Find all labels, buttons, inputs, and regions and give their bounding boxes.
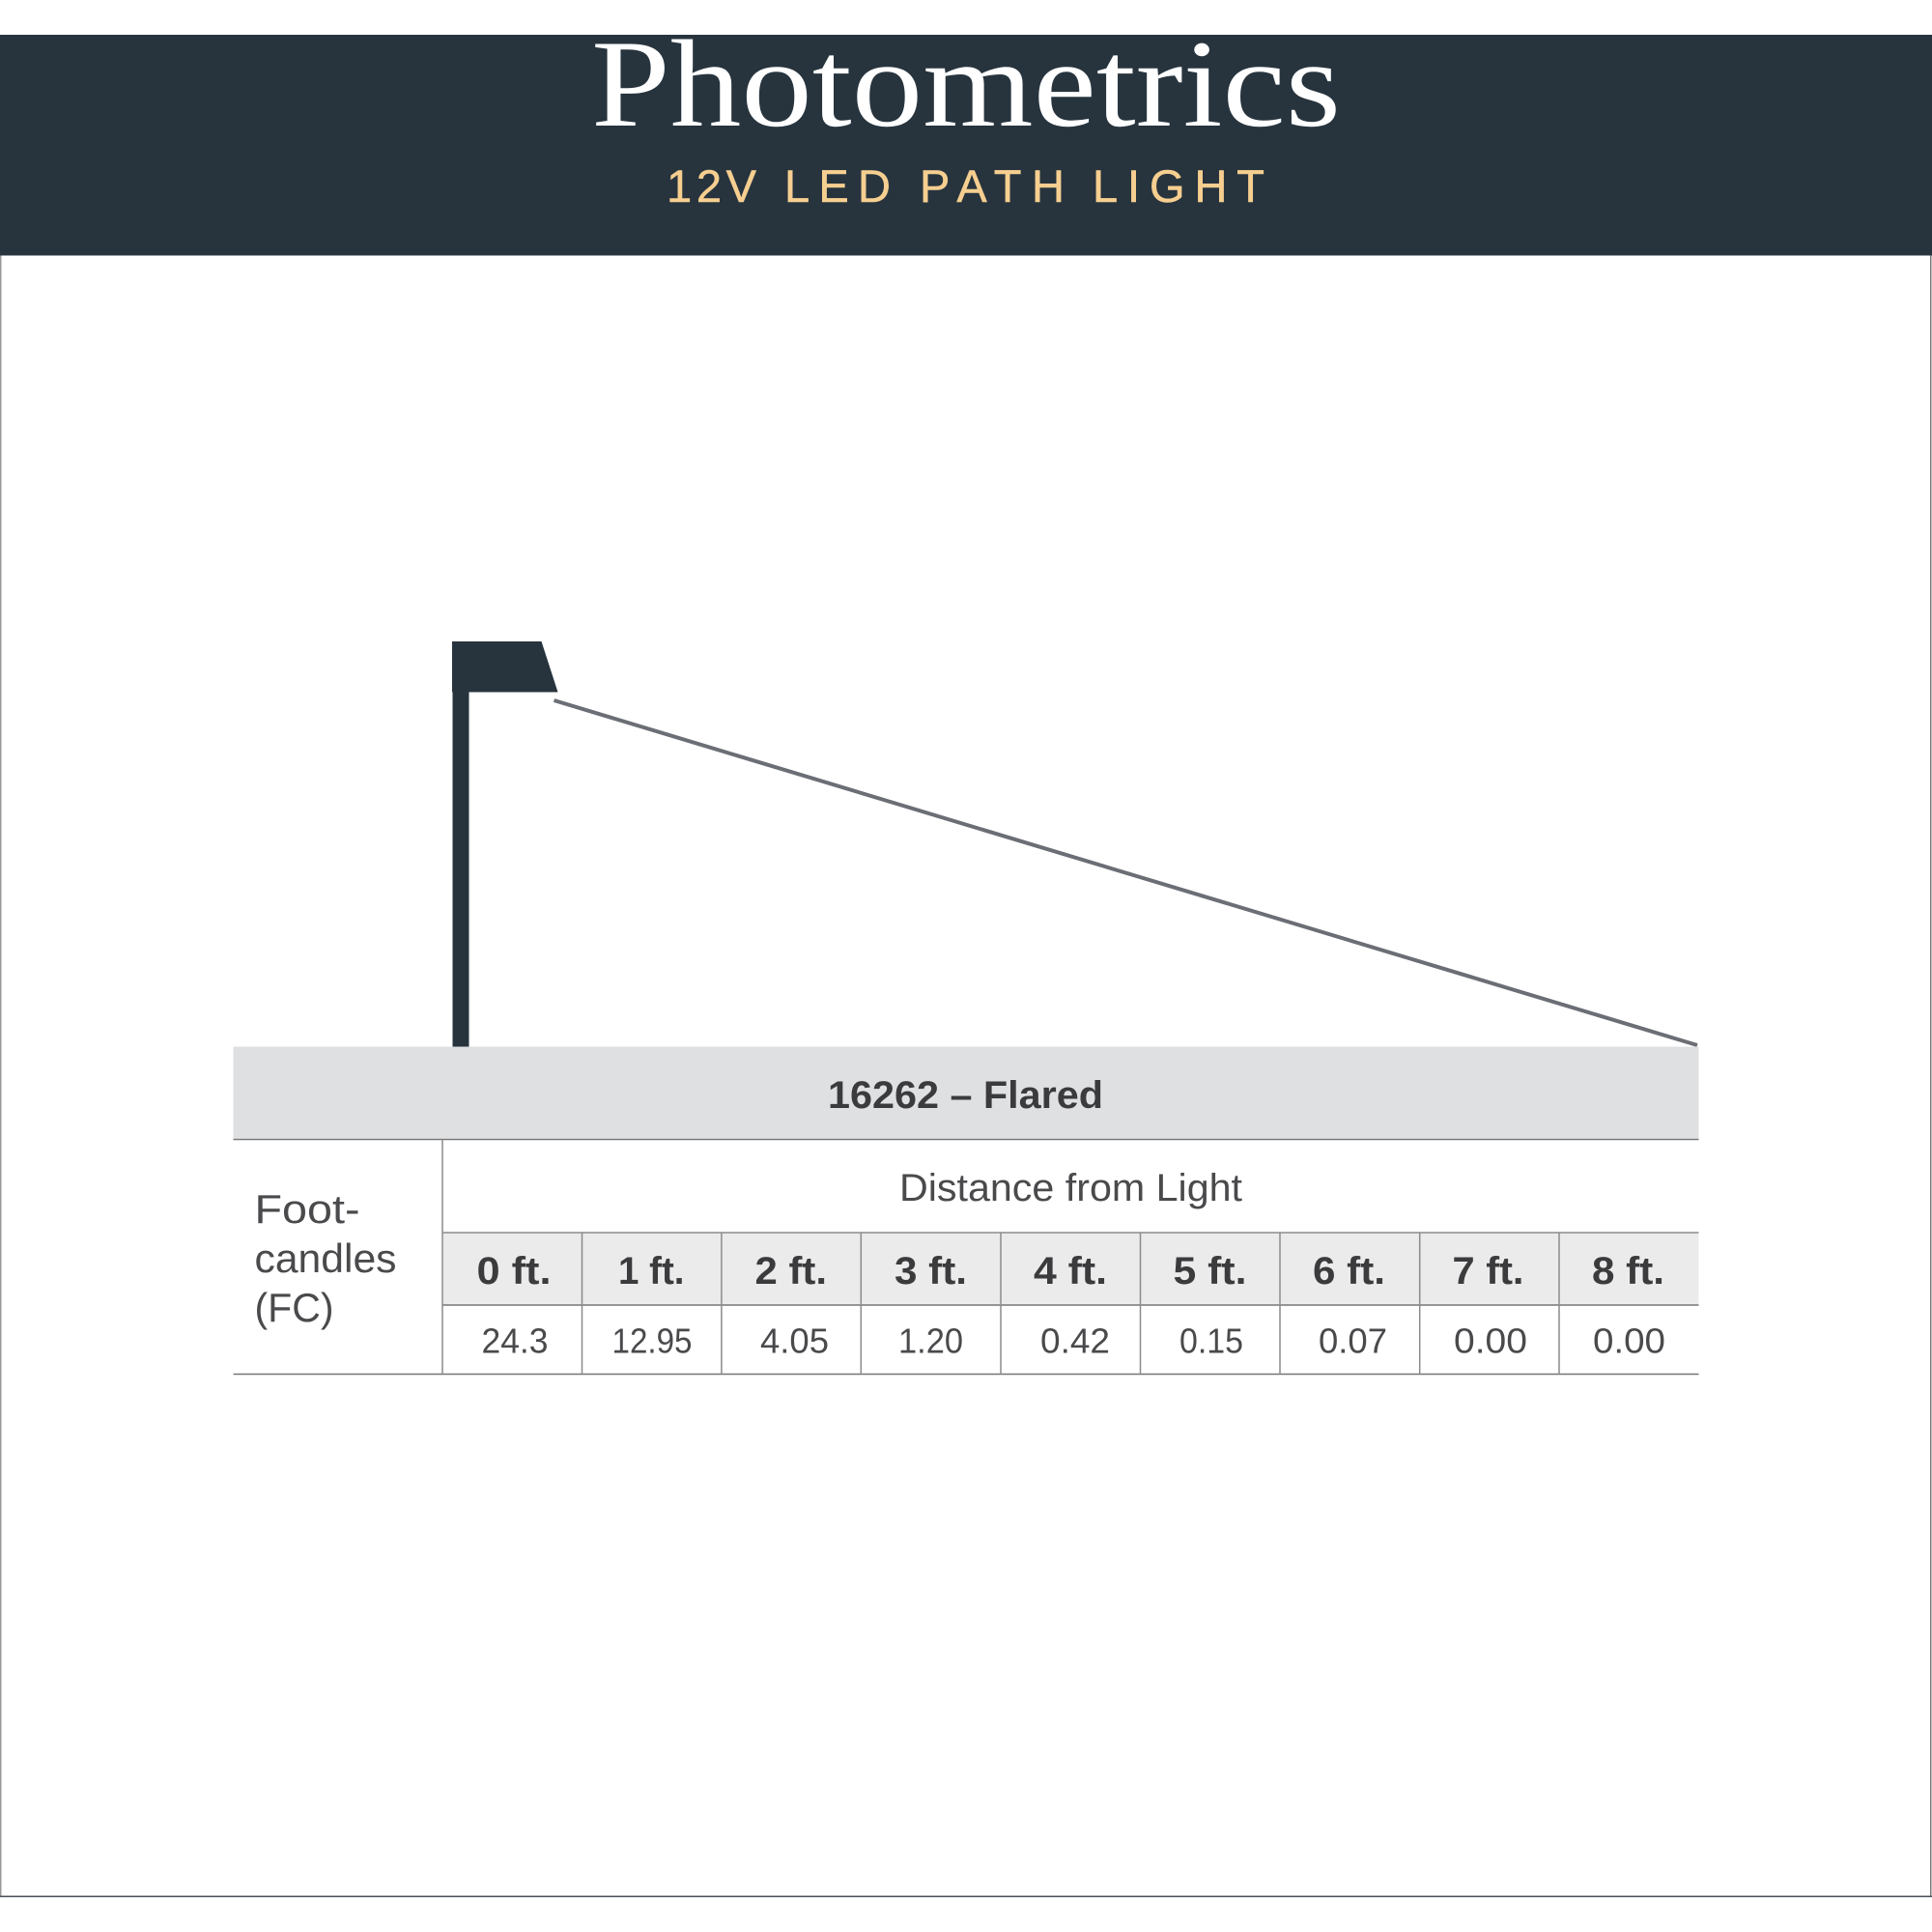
title: Photometrics (591, 14, 1341, 153)
row label: foot-candles (255, 1186, 396, 1330)
foot-candle values (481, 1321, 1665, 1360)
distance headers: 4 ft. (1034, 1250, 1107, 1293)
row label: foot-candles: candles (255, 1236, 396, 1281)
row label: foot-candles: (FC) (255, 1285, 334, 1330)
header cell shading (442, 1233, 1698, 1305)
foot-candle values: 1.20 (898, 1321, 963, 1360)
icon: path light (452, 641, 558, 1047)
foot-candle values: 0.00 (1454, 1321, 1527, 1360)
light fixture diagram (452, 641, 1697, 1047)
header banner (0, 14, 1932, 255)
foot-candle values: 12.95 (612, 1321, 692, 1360)
distance headers: 2 ft. (755, 1250, 827, 1293)
subtitle: 12V (667, 160, 757, 212)
distance headers: 7 ft. (1453, 1250, 1524, 1293)
table grid lines (234, 1140, 1698, 1374)
subtitle: LIGHT (1093, 160, 1264, 212)
distance headers: 3 ft. (895, 1250, 967, 1293)
subtitle: PATH (920, 160, 1065, 212)
distance headers: 8 ft. (1592, 1250, 1664, 1293)
distance headers (477, 1250, 1664, 1293)
light beam line (554, 700, 1697, 1045)
foot-candle values: 0.15 (1179, 1321, 1243, 1360)
distance headers: 0 ft. (477, 1250, 551, 1293)
photometric table (234, 1047, 1698, 1374)
subtitle: LED (784, 160, 891, 212)
table title bar: 16262 – Flared (828, 1074, 1103, 1117)
subtitle (667, 160, 1264, 212)
distance headers: 1 ft. (618, 1250, 684, 1293)
foot-candle values: 0.00 (1593, 1321, 1665, 1360)
table title bar (234, 1047, 1698, 1138)
foot-candle values: 4.05 (760, 1321, 829, 1360)
column group heading: Distance from Light (899, 1167, 1242, 1209)
distance headers: 5 ft. (1173, 1250, 1246, 1293)
foot-candle values: 24.3 (481, 1321, 549, 1360)
row label: foot-candles: Foot- (255, 1186, 359, 1232)
distance headers: 6 ft. (1313, 1250, 1385, 1293)
foot-candle values: 0.42 (1040, 1321, 1110, 1360)
foot-candle values: 0.07 (1319, 1321, 1387, 1360)
